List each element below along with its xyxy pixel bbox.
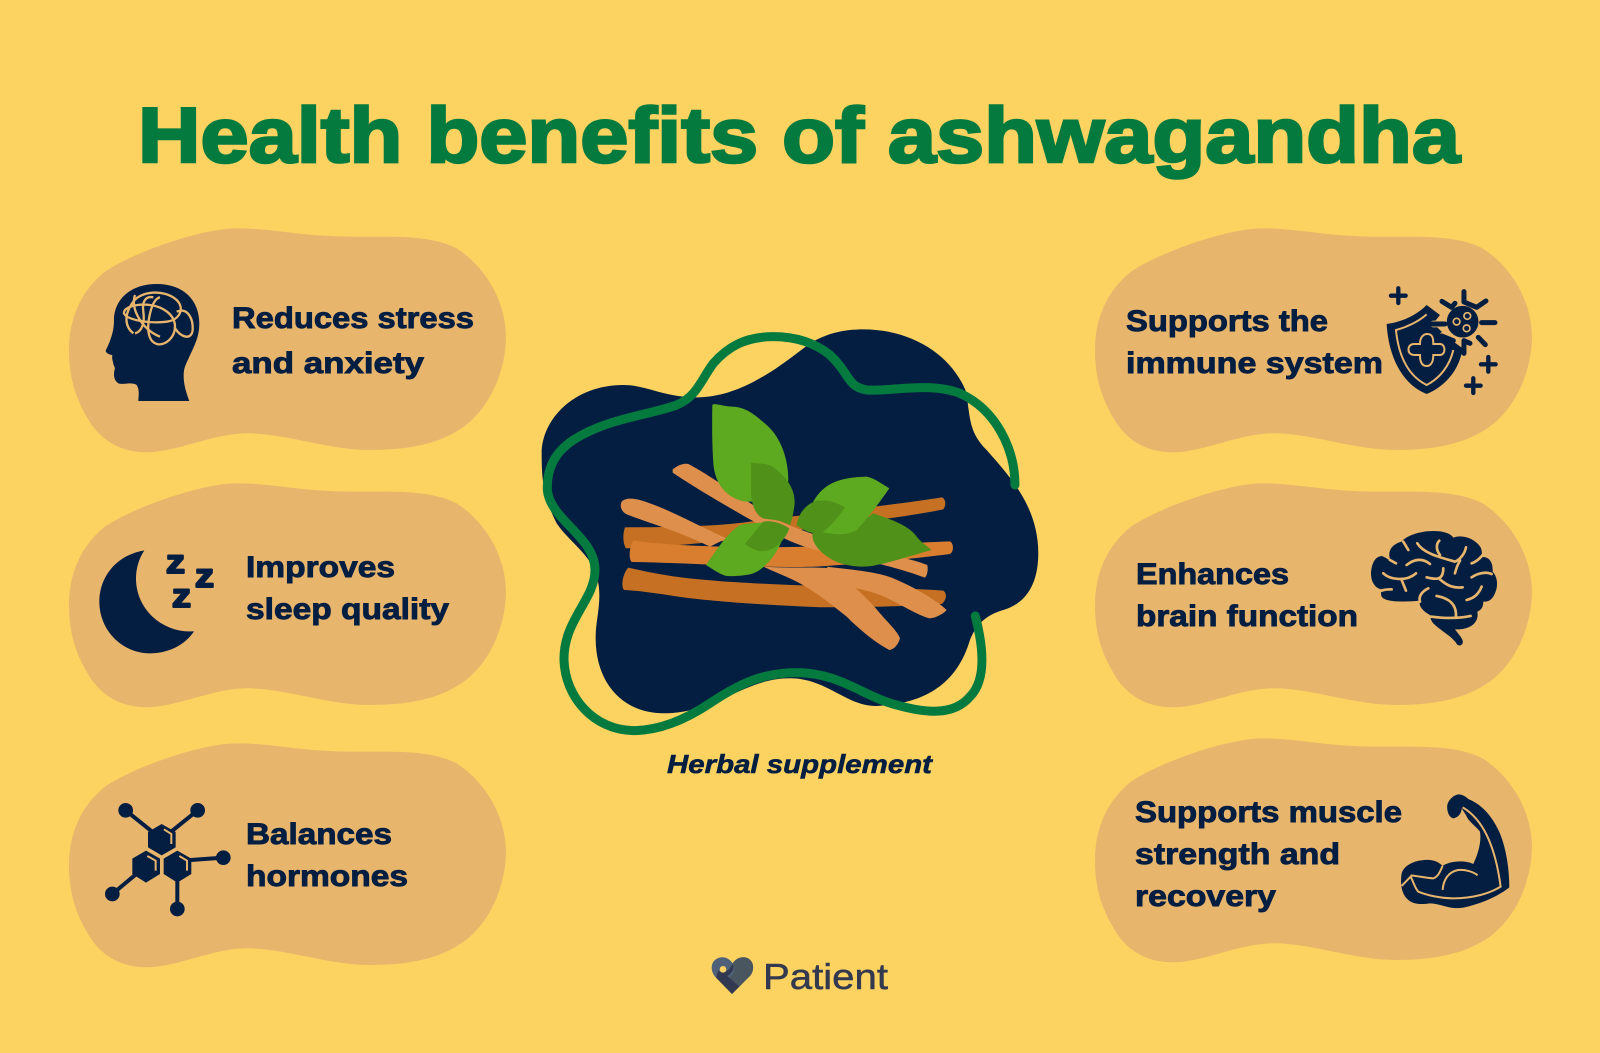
label text: recovery — [1135, 880, 1276, 913]
icon: crescent moon with sleep letters — [99, 543, 214, 653]
panel: enhances brain function — [1095, 483, 1532, 707]
green outline swirl — [547, 337, 1015, 731]
label text: and anxiety — [232, 347, 424, 380]
logo: Patient — [712, 956, 888, 997]
label text: Balances — [246, 818, 392, 851]
icon: shield with virus — [1387, 288, 1496, 394]
icon: heart logo mark — [712, 957, 753, 994]
label text: Enhances — [1136, 558, 1289, 591]
label text: immune system — [1126, 347, 1383, 380]
icon: crescent moon with sleep letters: z — [195, 557, 214, 594]
icon: brain — [1371, 531, 1497, 646]
icon: crescent moon with sleep letters: z — [172, 577, 191, 614]
central illustration: herbal supplement — [542, 329, 1038, 779]
panel: reduces stress and anxiety — [69, 228, 506, 452]
label text: sleep quality — [246, 593, 449, 626]
panel: supports muscle strength and recovery — [1095, 738, 1532, 962]
label text: brain function — [1136, 600, 1358, 633]
panel: improves sleep quality — [69, 483, 506, 707]
caption: Herbal supplement — [667, 749, 934, 779]
title: Health benefits of ashwagandha — [138, 91, 1461, 179]
icon: crescent moon with sleep letters: z — [166, 543, 185, 580]
label text: Supports muscle — [1135, 796, 1402, 829]
label text: strength and — [1135, 838, 1340, 871]
icon: head with tangled thoughts — [106, 284, 199, 401]
ashwagandha roots and leaves — [621, 404, 953, 650]
icon: hormone molecule — [105, 803, 231, 916]
panel: supports the immune system — [1095, 228, 1532, 452]
label text: Supports the — [1126, 305, 1328, 338]
panel: balances hormones — [69, 743, 506, 967]
label text: Improves — [246, 551, 395, 584]
wordmark: Patient — [763, 956, 888, 997]
navy blob backdrop — [542, 329, 1038, 713]
label text: hormones — [246, 860, 408, 893]
icon: flexed arm — [1401, 794, 1509, 908]
label text: Reduces stress — [232, 302, 474, 335]
